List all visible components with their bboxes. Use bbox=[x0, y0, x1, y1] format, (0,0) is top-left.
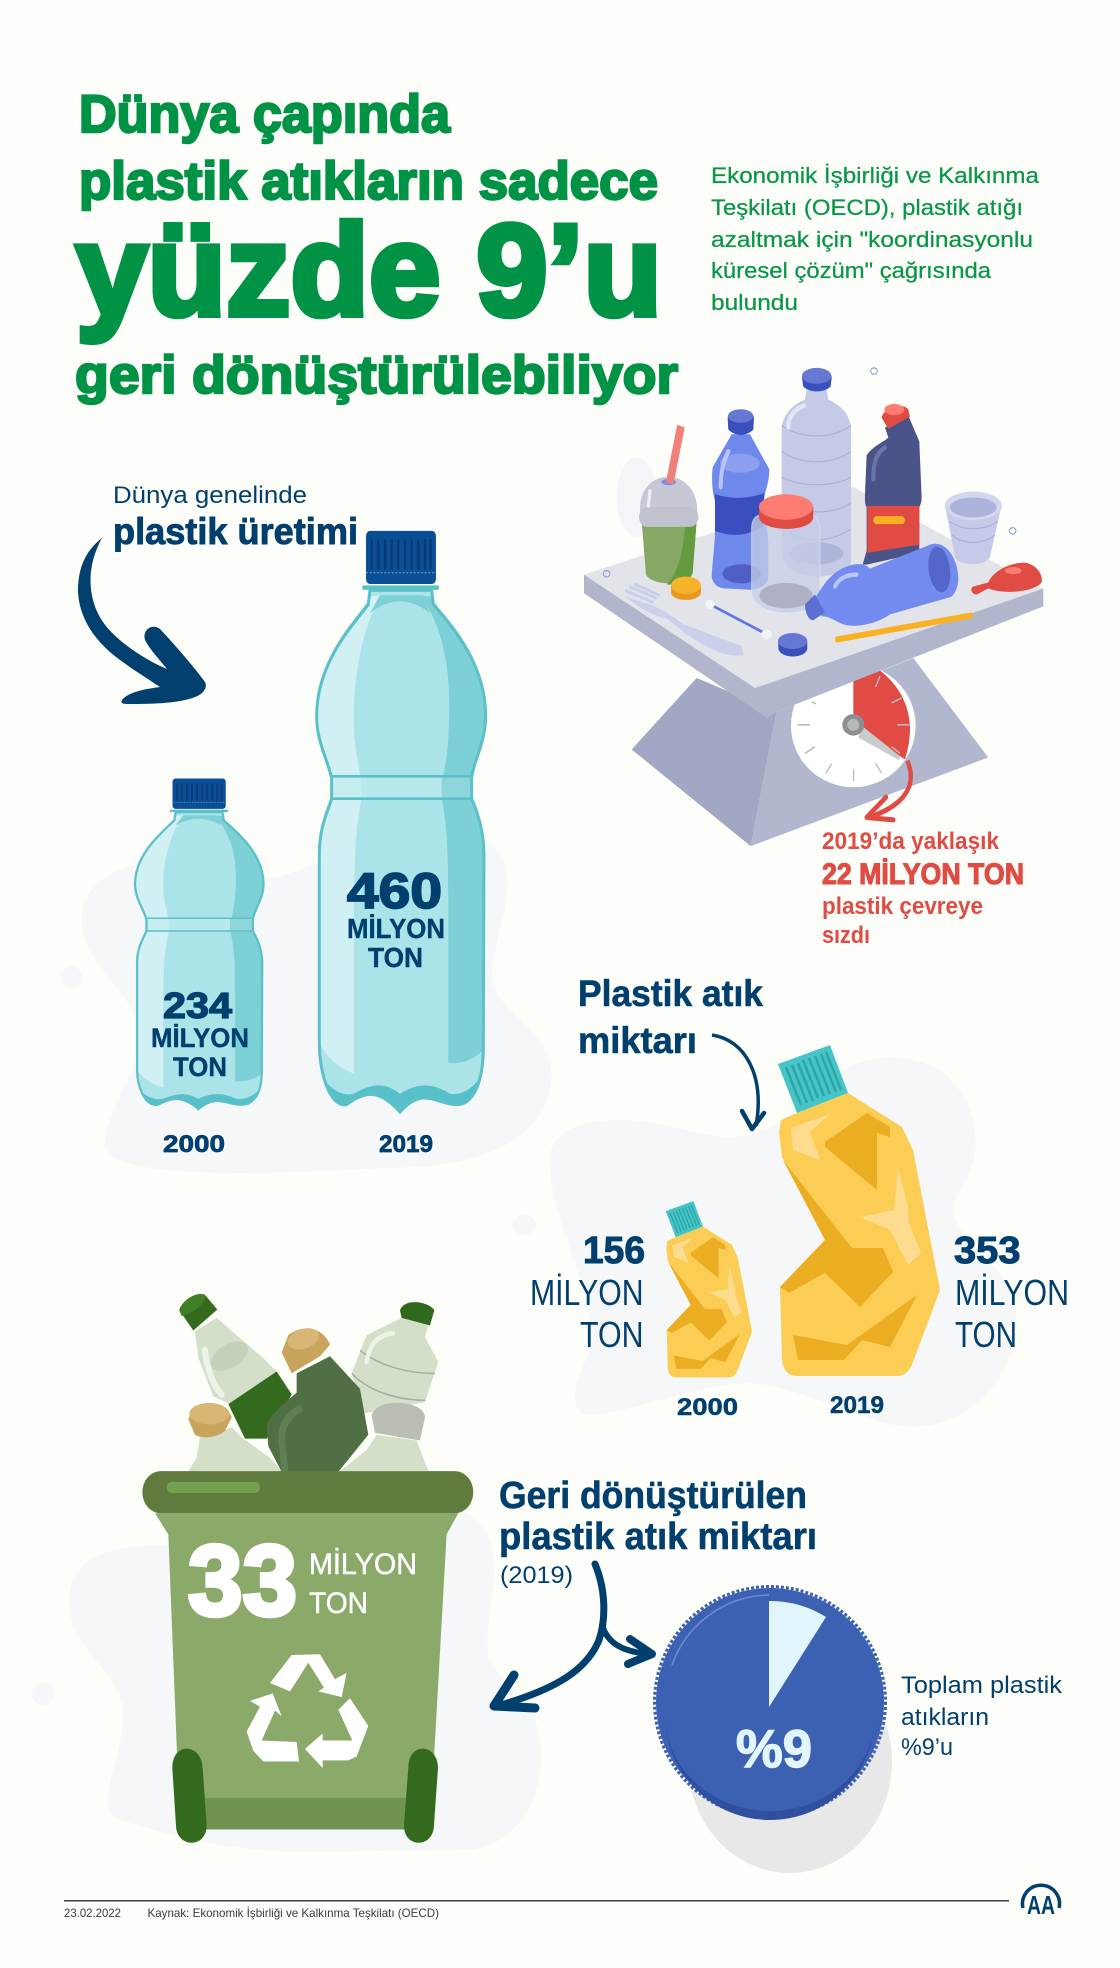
label: 234 million tons bbox=[151, 985, 249, 1082]
title: plastik atıkların sadece bbox=[79, 152, 658, 211]
bin wheels bbox=[172, 1749, 438, 1843]
heading: plastic waste: Plastik atık bbox=[578, 973, 763, 1014]
yellow cap bbox=[671, 577, 701, 600]
cotton swab bbox=[705, 600, 772, 639]
bin body bbox=[155, 1513, 458, 1829]
green bottle left bbox=[179, 1294, 292, 1439]
intro text bbox=[711, 163, 1040, 315]
bottle cap chart: 9 percent: %9 bbox=[736, 1720, 812, 1779]
label: 460 million tons bbox=[347, 863, 445, 973]
small bottle 2000 bbox=[133, 779, 267, 1113]
callout: 22 million tons: sızdı bbox=[822, 922, 870, 949]
heading: plastic production bbox=[113, 482, 358, 552]
label: 353 million tons: MİLYON bbox=[955, 1272, 1069, 1313]
illustration: plastic items on scale bbox=[584, 368, 1043, 846]
heading: plastic waste bbox=[578, 973, 763, 1061]
callout: 22 million tons: plastik çevreye bbox=[822, 893, 983, 920]
cap description: %9’u bbox=[901, 1734, 953, 1761]
label: 156 million tons: 156 bbox=[583, 1230, 645, 1272]
arrow: production bbox=[78, 538, 206, 704]
bottle lower left bbox=[188, 1403, 282, 1471]
cap description: Toplam plastik bbox=[901, 1672, 1063, 1699]
heading: plastic production: plastik üretimi bbox=[113, 511, 358, 552]
decorative rings bbox=[603, 368, 1016, 577]
callout: 22 million tons: 22 MİLYON TON bbox=[822, 858, 1024, 891]
label: 460 million tons: MİLYON bbox=[347, 913, 445, 944]
label: 234 million tons: MİLYON bbox=[151, 1023, 249, 1053]
heading: recycled plastic: plastik atık miktarı bbox=[499, 1516, 817, 1558]
title: Dünya çapında bbox=[79, 85, 451, 144]
heading: plastic production: Dünya genelinde bbox=[113, 482, 307, 509]
footer: 23.02.2022 bbox=[64, 1906, 121, 1920]
red arrow bbox=[867, 761, 911, 820]
label: 33 million tons: MİLYON bbox=[309, 1548, 417, 1581]
bottle cap chart: 9 percent bbox=[654, 1586, 886, 1820]
intro text: küresel çözüm" çağrısında bbox=[711, 258, 992, 283]
cap description: atıkların bbox=[901, 1704, 989, 1731]
heading: plastic waste: miktarı bbox=[578, 1020, 697, 1061]
forked arrow bbox=[494, 1564, 652, 1708]
callout: 22 million tons: 2019’da yaklaşık bbox=[822, 828, 999, 855]
small crushed bottle 2000 bbox=[666, 1201, 752, 1377]
scale platform bbox=[584, 487, 1043, 718]
label: 234 million tons: 234 bbox=[163, 985, 232, 1026]
green bottle right bbox=[352, 1302, 438, 1414]
title bbox=[75, 85, 678, 405]
illustration: recycling bin with bottles bbox=[142, 1294, 473, 1843]
intro text: Teşkilatı (OECD), plastik atığı bbox=[711, 195, 1023, 220]
scale base bbox=[632, 658, 988, 846]
year labels: production bbox=[163, 1131, 433, 1158]
label: 353 million tons: TON bbox=[955, 1314, 1017, 1355]
footer bbox=[64, 1900, 1009, 1920]
year labels: production: 2000 bbox=[163, 1131, 225, 1158]
recycle symbol bbox=[247, 1654, 368, 1768]
heading: recycled plastic: Geri dönüştürülen bbox=[499, 1475, 807, 1517]
background blob: production bbox=[61, 833, 552, 1173]
footer: Kaynak: Ekonomik İşbirliği ve Kalkınma Teşkilatı (OECD) bbox=[148, 1906, 439, 1920]
logo: AA: AA bbox=[1027, 1890, 1055, 1920]
label: 353 million tons: 353 bbox=[954, 1230, 1020, 1272]
background blob: recycling bbox=[32, 1500, 541, 1852]
year labels: waste: 2019 bbox=[830, 1392, 884, 1419]
bin lid bbox=[142, 1471, 473, 1513]
scale dial bbox=[791, 664, 916, 787]
shadow of coin bbox=[688, 1651, 892, 1873]
dark bottle bbox=[863, 404, 922, 565]
yellow straw bbox=[837, 616, 971, 639]
big crushed bottle 2019 bbox=[778, 1045, 940, 1376]
cap description bbox=[901, 1672, 1063, 1761]
blue cap bbox=[778, 633, 807, 656]
label: 156 million tons: MİLYON bbox=[530, 1272, 644, 1313]
bottle lower right bbox=[340, 1403, 428, 1471]
title: yüzde 9’u bbox=[76, 197, 662, 343]
background blob: waste bbox=[513, 1058, 1017, 1427]
plastic fork bbox=[625, 584, 743, 656]
label: 33 million tons: TON bbox=[309, 1587, 368, 1620]
intro text: azaltmak için "koordinasyonlu bbox=[711, 227, 1033, 252]
label: 460 million tons: 460 bbox=[347, 863, 442, 919]
label: 460 million tons: TON bbox=[368, 942, 423, 973]
arrow: waste bbox=[712, 1035, 764, 1129]
clear plastic cup bbox=[945, 492, 1002, 564]
drink cup with straw bbox=[617, 425, 698, 585]
label: 156 million tons: TON bbox=[580, 1314, 644, 1355]
dark jug bbox=[267, 1325, 368, 1472]
label: 234 million tons: TON bbox=[173, 1052, 227, 1082]
lying blue bottle bbox=[805, 544, 958, 626]
blue bottle bbox=[712, 409, 769, 590]
label: 353 million tons bbox=[954, 1230, 1069, 1355]
heading: recycled plastic: (2019) bbox=[500, 1562, 573, 1589]
jar bbox=[752, 494, 820, 613]
logo: AA bbox=[1022, 1885, 1060, 1920]
label: 33 million tons bbox=[188, 1525, 417, 1637]
clear bottle bbox=[782, 368, 851, 577]
intro text: Ekonomik İşbirliği ve Kalkınma bbox=[711, 163, 1040, 188]
label: 33 million tons: 33 bbox=[188, 1525, 297, 1637]
label: 156 million tons bbox=[530, 1230, 645, 1355]
big bottle 2019 bbox=[313, 531, 490, 1118]
heading: recycled plastic bbox=[499, 1475, 817, 1589]
title: geri dönüştürülebiliyor bbox=[75, 346, 678, 405]
red balloon bbox=[971, 563, 1042, 594]
intro text: bulundu bbox=[711, 290, 798, 315]
year labels: waste bbox=[677, 1392, 884, 1421]
year labels: waste: 2000 bbox=[677, 1394, 738, 1421]
year labels: production: 2019 bbox=[379, 1131, 433, 1158]
callout: 22 million tons bbox=[822, 828, 1024, 949]
